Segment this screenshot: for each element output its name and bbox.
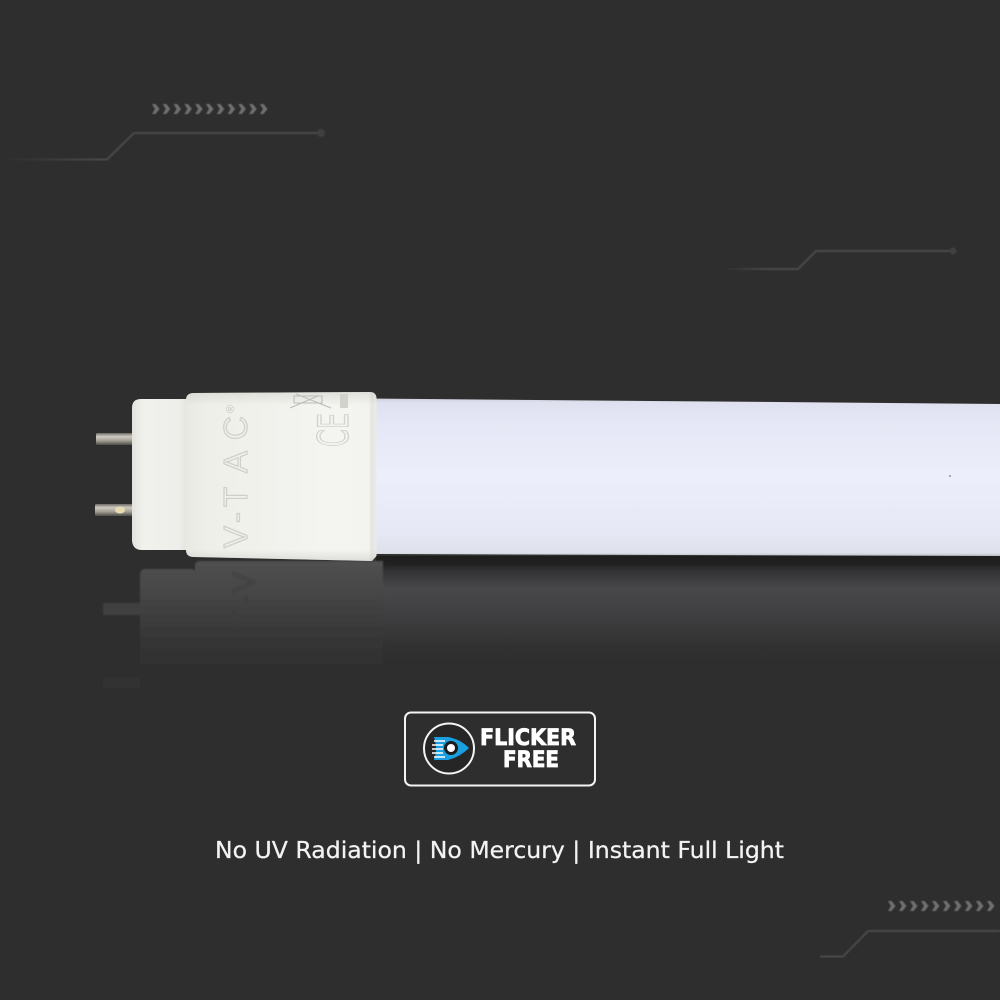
icon: eye in circle [424, 724, 474, 774]
wide end cap [186, 392, 376, 561]
chevron row: bottom right [888, 901, 994, 911]
certification bar [340, 394, 348, 408]
chevron row: top left [152, 104, 268, 114]
decorative circuit line: top left [0, 129, 325, 160]
glass tube body [370, 398, 1000, 556]
badge outline [405, 712, 595, 786]
LED tube [95, 392, 1000, 561]
top pin [96, 433, 133, 445]
decorative circuit line: bottom right [820, 931, 1000, 956]
tube reflection [103, 556, 1000, 705]
feature line: No UV Radiation | No Mercury | Instant Full Light [215, 838, 784, 864]
narrow end cap [132, 399, 190, 550]
registered mark: ® [225, 405, 237, 413]
CE marking: CE [309, 413, 358, 447]
brand marking: V-TAC: V-TAC [217, 416, 254, 548]
flicker free badge [405, 712, 595, 786]
tube reflection: V-T [226, 572, 261, 632]
WEEE bin icon [290, 394, 331, 408]
badge text: FREE: FREE [503, 748, 559, 773]
badge text: FLICKER: FLICKER [480, 726, 576, 751]
decorative circuit line: top right [720, 248, 956, 269]
bottom pin [95, 504, 133, 516]
